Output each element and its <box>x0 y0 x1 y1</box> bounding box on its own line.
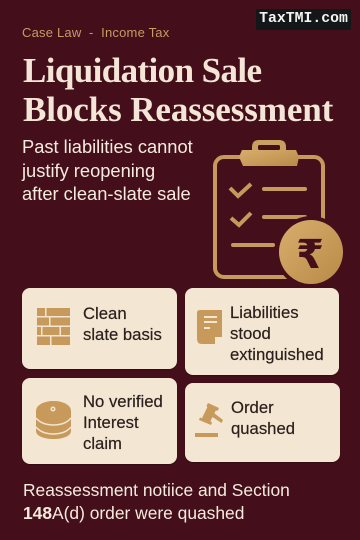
card text <box>230 303 324 364</box>
card: order quashed <box>185 383 340 462</box>
icon: clipboard with rupee coin: ₹ <box>296 232 324 278</box>
card: clean slate basis <box>22 288 177 369</box>
card text <box>83 304 162 344</box>
icon: clipboard with rupee coin <box>213 140 343 284</box>
subtitle <box>22 136 193 204</box>
card: no verified interest claim <box>22 378 177 464</box>
footer text <box>23 480 290 523</box>
icon: gavel <box>195 403 223 437</box>
category label: Case Law - Income Tax <box>22 25 169 40</box>
icon: brick wall <box>37 308 70 345</box>
card text: Clean <box>83 304 127 323</box>
icon: coin stack <box>36 401 71 439</box>
title <box>23 51 334 129</box>
footer text: Reassessment notiice and Section <box>23 480 290 500</box>
card: liabilities stood extinguished <box>185 288 339 375</box>
icon: document <box>197 310 222 344</box>
card text: claim <box>83 434 122 453</box>
card text: extinguished <box>230 345 324 364</box>
card text: Liabilities <box>230 303 299 322</box>
card text: Interest <box>83 413 139 432</box>
card text: No verified <box>83 392 163 411</box>
footer text: 148A(d) order were quashed <box>23 503 244 523</box>
subtitle: justify reopening <box>22 160 155 180</box>
card text: Order <box>231 398 274 417</box>
card text <box>231 398 295 438</box>
card text: slate basis <box>83 325 162 344</box>
title: Blocks Reassessment <box>23 90 333 129</box>
title: Liquidation Sale <box>23 51 261 90</box>
subtitle: after clean-slate sale <box>22 183 191 204</box>
subtitle: Past liabilities cannot <box>22 136 193 157</box>
brand badge: TaxTMI.com <box>259 11 348 27</box>
card text <box>83 392 163 453</box>
card text: stood <box>230 324 271 343</box>
card text: quashed <box>231 419 295 438</box>
